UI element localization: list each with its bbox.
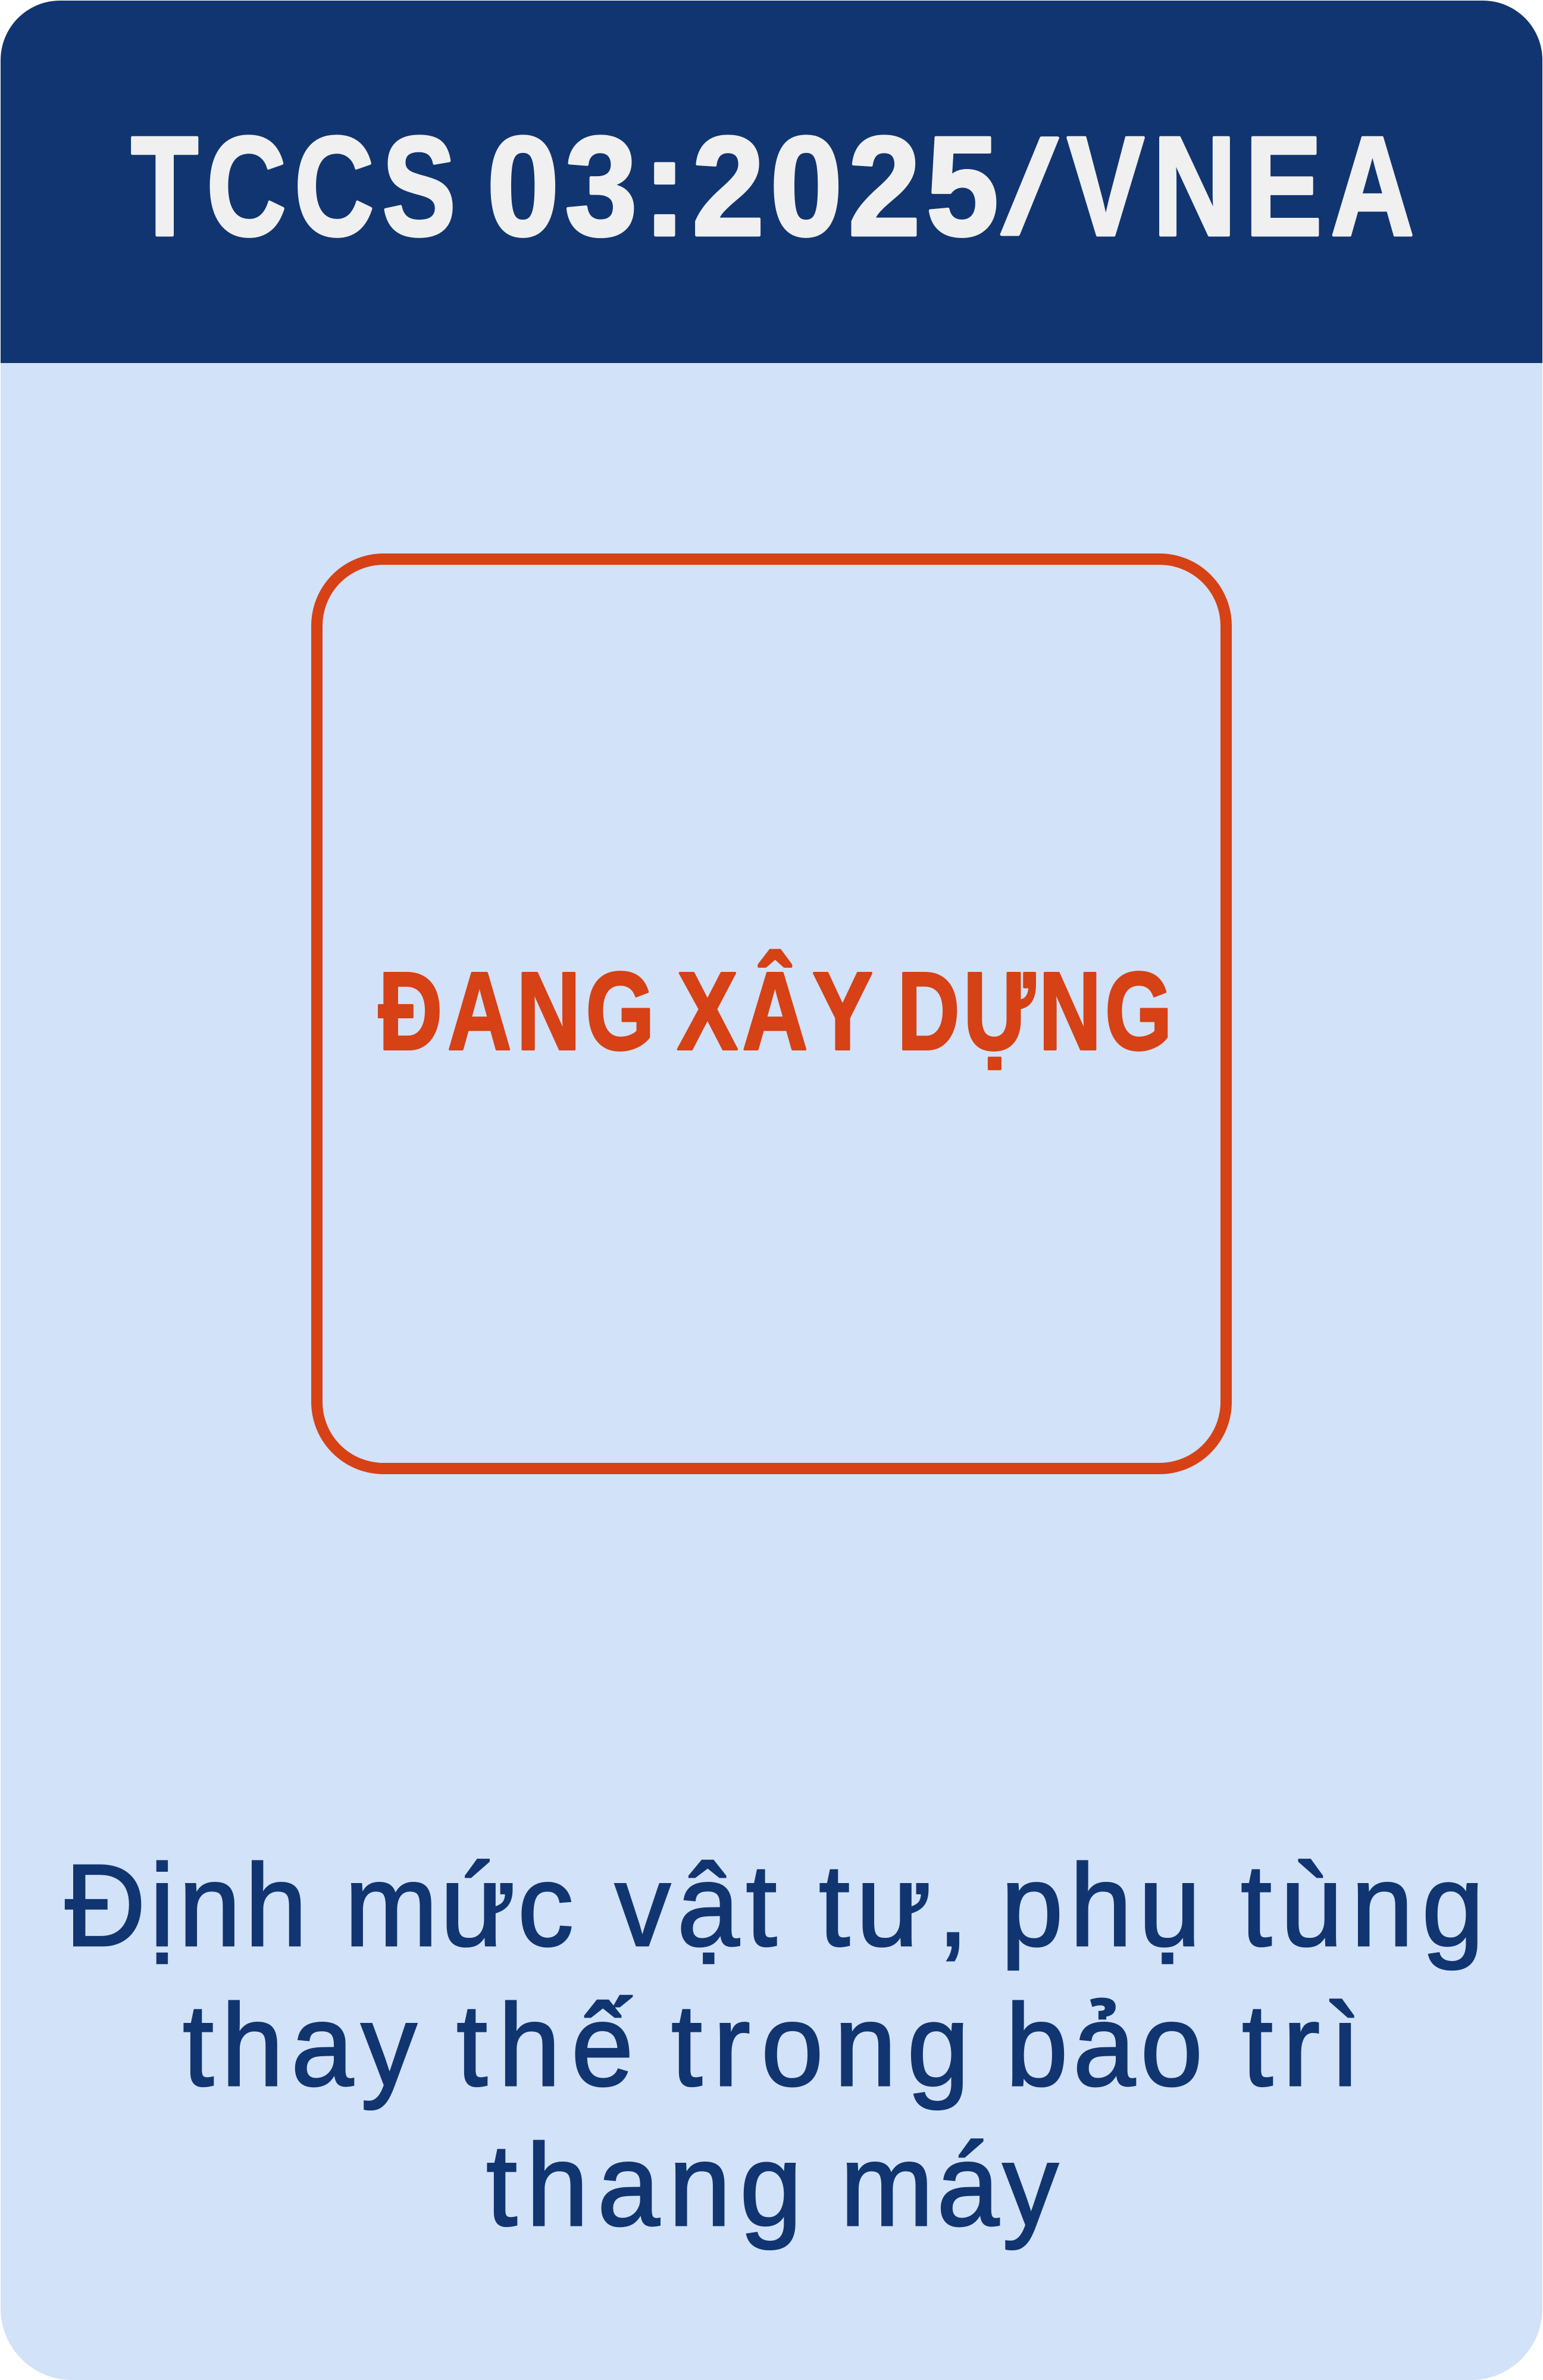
description line 1: vật — [615, 1840, 777, 1971]
description line 2: thay — [183, 1979, 417, 2110]
description line 2: trì — [1242, 1979, 1361, 2110]
status label: under construction: DỰNG — [897, 950, 1172, 1073]
heading: document code: VNEA — [1067, 108, 1414, 265]
status label: under construction: ĐANG — [378, 949, 655, 1073]
status label: under construction: XÂY — [677, 950, 873, 1073]
heading: document code: TCCS — [131, 108, 456, 265]
header band — [1, 1, 1542, 363]
description line 2: trong — [671, 1979, 969, 2110]
description line 1: phụ — [1001, 1840, 1201, 1971]
heading: document code: / — [1002, 114, 1058, 261]
description line 1: Định — [65, 1840, 307, 1971]
description line 3 — [486, 2119, 1059, 2250]
description line 3: thang — [486, 2119, 802, 2250]
placeholder frame — [317, 559, 1226, 1469]
description line 1 — [65, 1840, 1484, 1971]
status label: under construction — [378, 949, 1172, 1073]
description text block — [65, 1840, 1484, 2250]
heading: document code — [131, 108, 1414, 265]
description line 1: mức — [345, 1840, 574, 1971]
description line 2: thế — [456, 1979, 634, 2110]
description line 2: bảo — [1006, 1979, 1203, 2110]
description line 1: tùng — [1241, 1840, 1484, 1971]
description line 1: tư, — [819, 1840, 969, 1971]
description line 2 — [183, 1979, 1361, 2110]
heading: document code: 03:2025 — [487, 108, 999, 265]
description line 3: máy — [840, 2119, 1059, 2250]
